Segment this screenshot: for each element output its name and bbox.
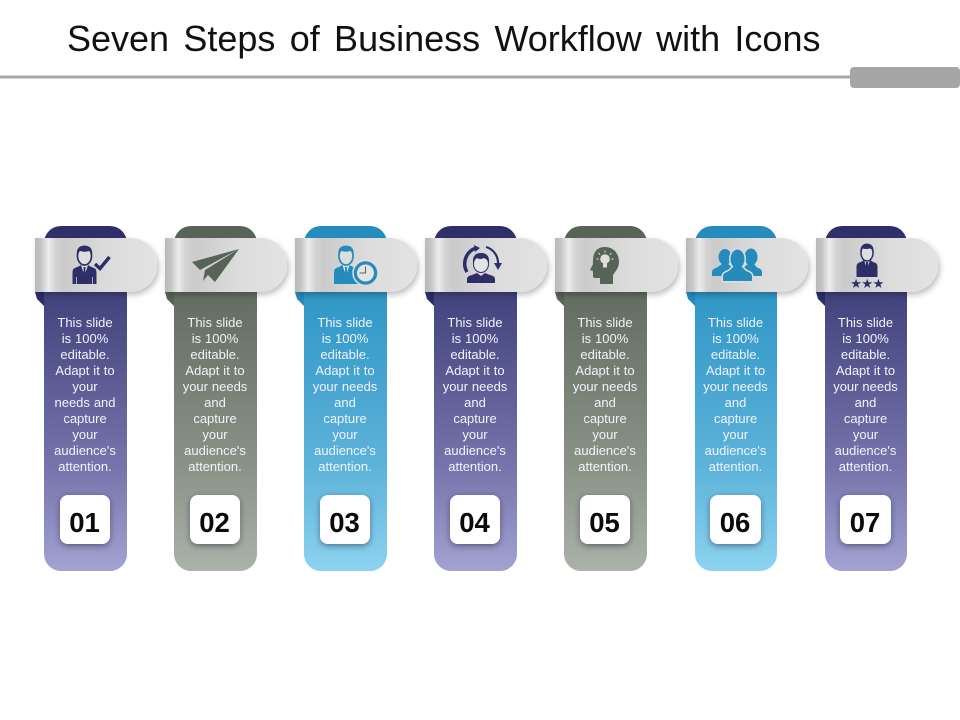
- body text 06: your: [723, 427, 749, 442]
- body text 05: is 100%: [582, 331, 629, 346]
- body text 01: audience's: [54, 443, 116, 458]
- band 07: [816, 238, 938, 292]
- number badge 03: [320, 495, 370, 544]
- icon: person with three stars: ★★★: [850, 277, 884, 292]
- body text 03: [313, 315, 378, 474]
- body text 05: This slide: [577, 315, 633, 330]
- body text 07: your: [853, 427, 879, 442]
- body text 03: capture: [323, 411, 367, 426]
- body text 01: attention.: [58, 459, 112, 474]
- icon: group of three people: [712, 248, 762, 281]
- body text 01: This slide: [57, 315, 113, 330]
- body text 06: is 100%: [712, 331, 759, 346]
- body text 06: and: [725, 395, 746, 410]
- body text 03: your needs: [313, 379, 378, 394]
- number badge 07: 07: [850, 507, 880, 538]
- body text 05: Adapt it to: [575, 363, 635, 378]
- panel: step 02: [165, 226, 287, 571]
- body text 03: attention.: [318, 459, 372, 474]
- body text 01: editable.: [60, 347, 110, 362]
- body text 01: [54, 315, 116, 474]
- body text 05: your: [592, 427, 618, 442]
- body text 03: and: [334, 395, 356, 410]
- fold 01: [35, 292, 44, 306]
- body text 03: is 100%: [322, 331, 369, 346]
- body text 04: capture: [453, 411, 497, 426]
- number badge 07: [840, 495, 891, 544]
- body text 07: [833, 315, 898, 474]
- number badge 04: 04: [459, 507, 490, 538]
- panel: step 01: [35, 226, 157, 571]
- body text 04: your needs: [443, 379, 508, 394]
- body text 05: [573, 315, 638, 474]
- column 05: [564, 226, 647, 571]
- body text 03: This slide: [317, 315, 373, 330]
- number badge 05: 05: [589, 507, 620, 538]
- number badge 02: [190, 495, 240, 544]
- icon: businessman with clock: [334, 246, 378, 286]
- icon: paper plane: [192, 249, 239, 282]
- body text 01: your: [72, 427, 98, 442]
- body text 06: capture: [714, 411, 757, 426]
- body text 06: Adapt it to: [706, 363, 765, 378]
- panel: step 05: [555, 226, 678, 571]
- body text 04: This slide: [447, 315, 503, 330]
- body text 06: your needs: [703, 379, 768, 394]
- body text 04: and: [464, 395, 486, 410]
- body text 01: is 100%: [62, 331, 109, 346]
- body text 01: your: [72, 379, 98, 394]
- body text 02: and: [204, 395, 226, 410]
- body text 06: [703, 315, 768, 474]
- body text 04: editable.: [450, 347, 500, 362]
- body text 07: attention.: [839, 459, 892, 474]
- header rule and tab: [0, 67, 960, 88]
- body text 02: your: [202, 427, 228, 442]
- icon: businessman with check mark: [72, 246, 110, 284]
- body text 01: capture: [63, 411, 107, 426]
- body text 04: is 100%: [452, 331, 499, 346]
- body text 04: [443, 315, 508, 474]
- body text 01: Adapt it to: [55, 363, 115, 378]
- band 01: [35, 238, 157, 292]
- body text 05: attention.: [578, 459, 632, 474]
- body text 02: audience's: [184, 443, 246, 458]
- band 03: [295, 238, 417, 292]
- body text 01: needs and: [54, 395, 116, 410]
- body text 07: This slide: [838, 315, 893, 330]
- body text 03: audience's: [314, 443, 376, 458]
- body text 03: editable.: [320, 347, 370, 362]
- panel: step 07: [816, 226, 938, 571]
- body text 04: your: [462, 427, 488, 442]
- body text 06: attention.: [709, 459, 762, 474]
- body text 07: audience's: [835, 443, 897, 458]
- body text 02: is 100%: [192, 331, 239, 346]
- panel: step 06: [686, 226, 808, 571]
- body text 05: editable.: [580, 347, 630, 362]
- body text 02: your needs: [183, 379, 248, 394]
- body text 06: editable.: [711, 347, 760, 362]
- band 06: [686, 238, 808, 292]
- title: Seven Steps of Business Workflow with Icons: [67, 18, 820, 59]
- body text 05: capture: [583, 411, 627, 426]
- panel: step 04: [425, 226, 547, 571]
- column 02: [174, 226, 257, 571]
- body text 06: This slide: [708, 315, 763, 330]
- column 07: [825, 226, 907, 571]
- body text 04: attention.: [448, 459, 502, 474]
- fold 02: [165, 292, 174, 306]
- number badge 03: 03: [329, 507, 360, 538]
- panel: step 03: [295, 226, 417, 571]
- body text 02: Adapt it to: [185, 363, 245, 378]
- number badge 01: 01: [69, 507, 100, 538]
- fold 03: [295, 292, 304, 306]
- number badge 02: 02: [199, 507, 230, 538]
- body text 02: This slide: [187, 315, 243, 330]
- body text 02: capture: [193, 411, 237, 426]
- number badge 01: [60, 495, 110, 544]
- body text 05: audience's: [574, 443, 636, 458]
- fold 06: [686, 292, 695, 306]
- fold 05: [555, 292, 564, 306]
- icon: person inside cycle arrows: [465, 245, 502, 283]
- number badge 04: [450, 495, 500, 544]
- band 05: [555, 238, 678, 292]
- body text 03: your: [332, 427, 358, 442]
- body text 07: your needs: [833, 379, 898, 394]
- fold 07: [816, 292, 825, 306]
- body text 03: Adapt it to: [315, 363, 375, 378]
- band 04: [425, 238, 547, 292]
- number badge 06: 06: [720, 507, 750, 538]
- column 01: [44, 226, 127, 571]
- body text 07: and: [855, 395, 876, 410]
- body text 02: editable.: [190, 347, 240, 362]
- body text 05: and: [594, 395, 616, 410]
- number badge 05: [580, 495, 630, 544]
- body text 06: audience's: [705, 443, 767, 458]
- fold 04: [425, 292, 434, 306]
- body text 05: your needs: [573, 379, 638, 394]
- band 02: [165, 238, 287, 292]
- body text 02: attention.: [188, 459, 242, 474]
- column 06: [695, 226, 777, 571]
- body text 02: [183, 315, 248, 474]
- body text 07: capture: [844, 411, 887, 426]
- number badge 06: [710, 495, 761, 544]
- body text 04: Adapt it to: [445, 363, 505, 378]
- column 03: [304, 226, 387, 571]
- body text 04: audience's: [444, 443, 506, 458]
- body text 07: Adapt it to: [836, 363, 895, 378]
- icon: head with light bulb: [590, 247, 619, 284]
- column 04: [434, 226, 517, 571]
- body text 07: editable.: [841, 347, 890, 362]
- icon: person with three stars: [850, 244, 884, 292]
- body text 07: is 100%: [842, 331, 889, 346]
